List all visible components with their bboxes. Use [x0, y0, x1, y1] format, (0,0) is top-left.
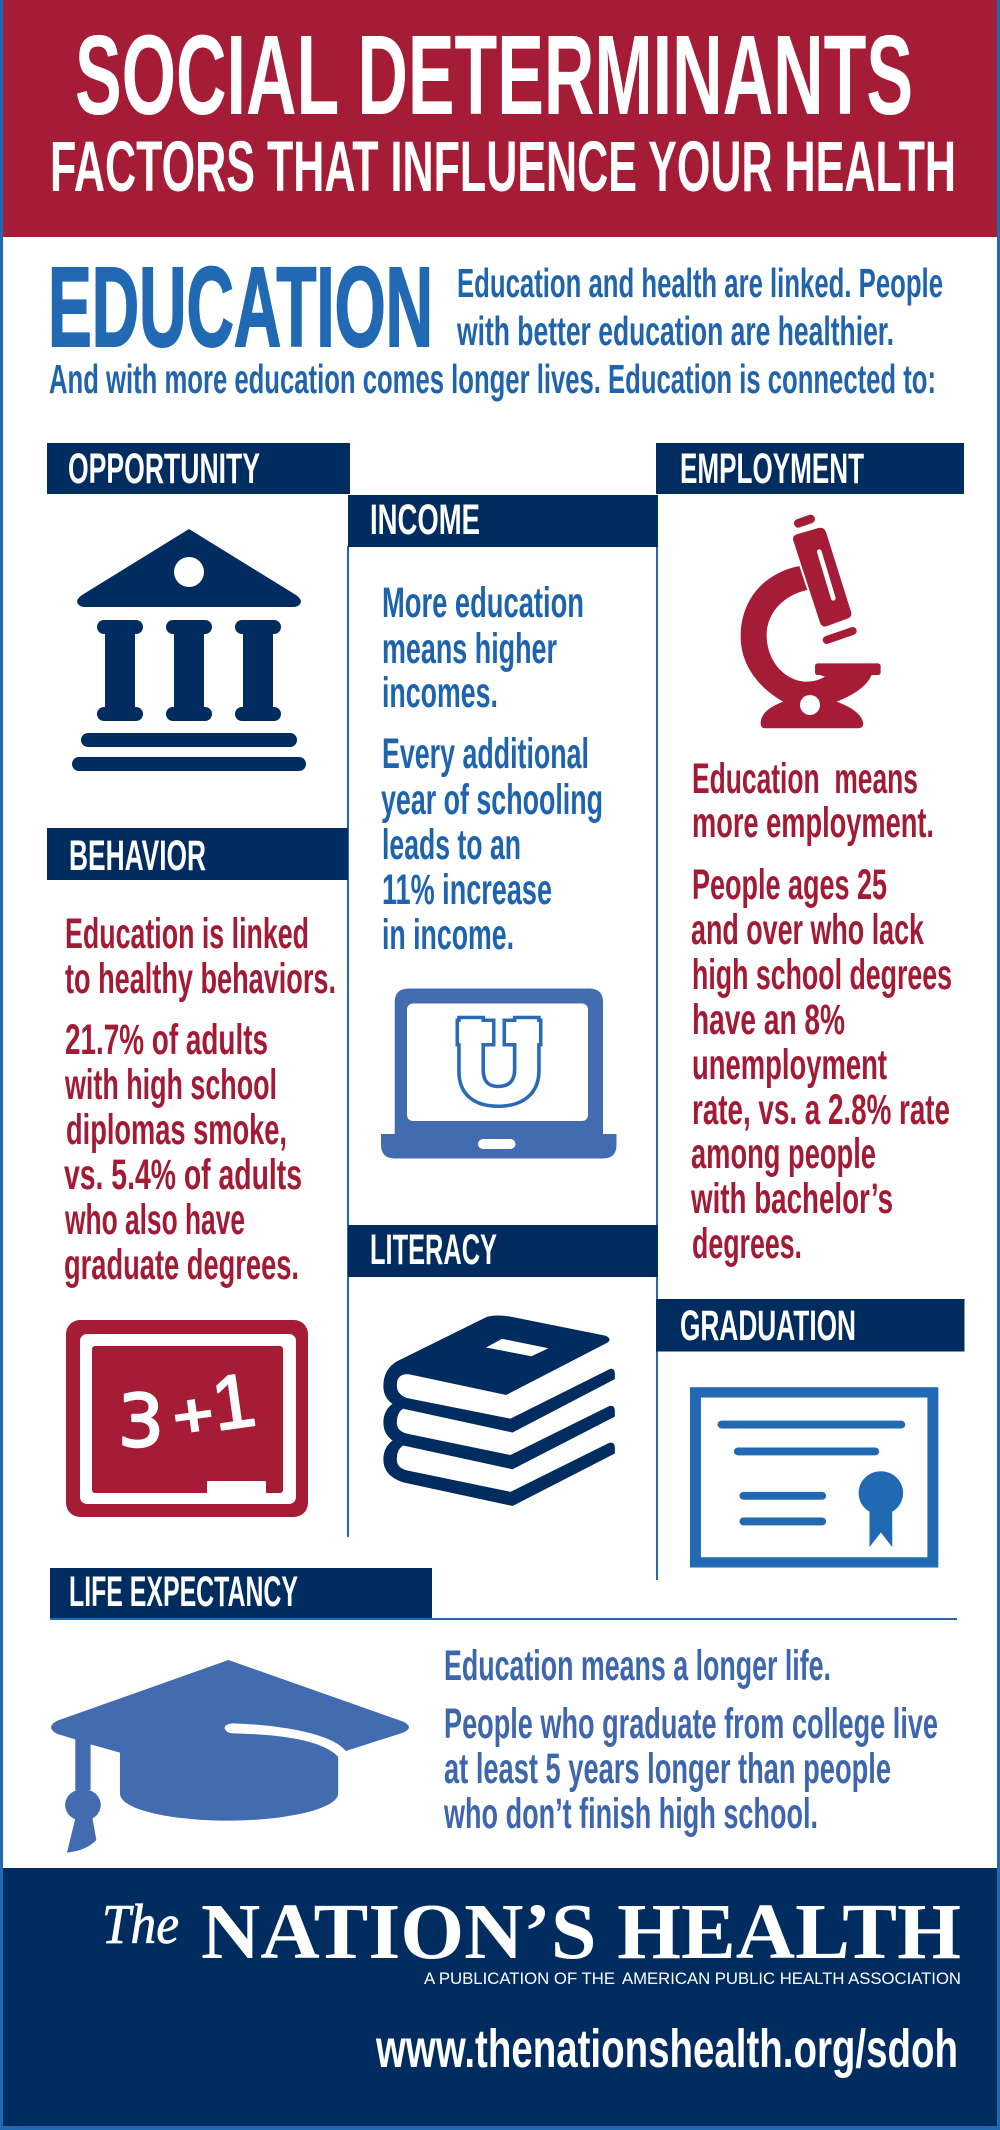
- text: income: in income.: [382, 912, 514, 959]
- icon: microscope: [741, 519, 881, 728]
- icon: bank building: [72, 529, 306, 771]
- tagline: A PUBLICATION OF THE: [424, 1969, 615, 1988]
- text: behavior: graduate degrees.: [64, 1242, 299, 1289]
- intro text: [49, 260, 943, 402]
- text: behavior: with high school: [64, 1062, 277, 1109]
- text: income: Every additional: [382, 731, 589, 778]
- text: behavior: to healthy behaviors.: [65, 956, 336, 1003]
- text: income: means higher: [382, 626, 557, 673]
- text: behavior: [64, 911, 336, 1289]
- panel: title banner: [3, 0, 997, 237]
- heading: education: EDUCATION: [48, 244, 433, 370]
- panel: literacy: [348, 1225, 658, 1506]
- text: income: incomes.: [382, 670, 498, 717]
- icon: chalkboard: +: [167, 1376, 219, 1454]
- icon: laptop: U: [455, 996, 543, 1128]
- icon: stack of books: [383, 1316, 615, 1506]
- panel: income: [348, 495, 658, 1158]
- heading: employment: EMPLOYMENT: [680, 445, 864, 493]
- icon: graduation cap: [51, 1660, 409, 1853]
- heading: graduation: GRADUATION: [680, 1302, 856, 1350]
- icon: diploma: [695, 1392, 933, 1562]
- icon: chalkboard: 3: [118, 1379, 164, 1463]
- heading: behavior: BEHAVIOR: [69, 832, 206, 880]
- text: income: [381, 580, 603, 959]
- heading: opportunity: OPPORTUNITY: [68, 445, 260, 493]
- text: life expectancy: [443, 1643, 938, 1838]
- heading: life expectancy: LIFE EXPECTANCY: [69, 1568, 298, 1616]
- logo: the nation's health: NATION’S HEALTH: [201, 1889, 961, 1976]
- heading: income: [348, 495, 658, 547]
- text: income: leads to an: [382, 822, 521, 869]
- tagline: [424, 1969, 961, 1988]
- text: income: 11% increase: [382, 867, 552, 914]
- panel: life expectancy: [50, 1568, 957, 1853]
- text: behavior: vs. 5.4% of adults: [64, 1152, 302, 1199]
- text: employment: with bachelor’s: [690, 1176, 893, 1223]
- heading: behavior: [47, 828, 348, 880]
- text: behavior: Education is linked: [65, 911, 309, 958]
- text: behavior: who also have: [64, 1197, 245, 1244]
- icon: laptop: U: [455, 996, 543, 1128]
- heading: literacy: [348, 1225, 658, 1277]
- logo: the nation's health: The: [102, 1894, 179, 1956]
- text: behavior: 21.7% of adults: [65, 1017, 268, 1064]
- heading: literacy: LITERACY: [370, 1226, 497, 1274]
- panel: graduation: [656, 1299, 964, 1562]
- text: employment: have an 8%: [692, 997, 845, 1044]
- text: employment: among people: [691, 1131, 876, 1178]
- text: employment: [690, 756, 952, 1268]
- icon: chalkboard: [66, 1320, 308, 1517]
- panel: footer: [3, 1868, 997, 2126]
- icon: chalkboard: 1: [207, 1357, 260, 1447]
- panel: employment: [656, 443, 964, 1268]
- text: income: More education: [382, 580, 584, 627]
- tagline: AMERICAN PUBLIC HEALTH ASSOCIATION: [622, 1969, 961, 1988]
- text: behavior: diplomas smoke,: [66, 1107, 287, 1154]
- heading: income: INCOME: [370, 496, 480, 544]
- heading: life expectancy: [50, 1568, 957, 1620]
- panel: behavior: [47, 828, 348, 1517]
- icon: laptop: [381, 988, 616, 1158]
- text: income: year of schooling: [381, 777, 603, 824]
- text: employment: degrees.: [692, 1221, 802, 1268]
- text: employment: People ages 25: [692, 862, 887, 909]
- panel: opportunity: [47, 443, 350, 771]
- text: employment: unemployment: [692, 1042, 887, 1089]
